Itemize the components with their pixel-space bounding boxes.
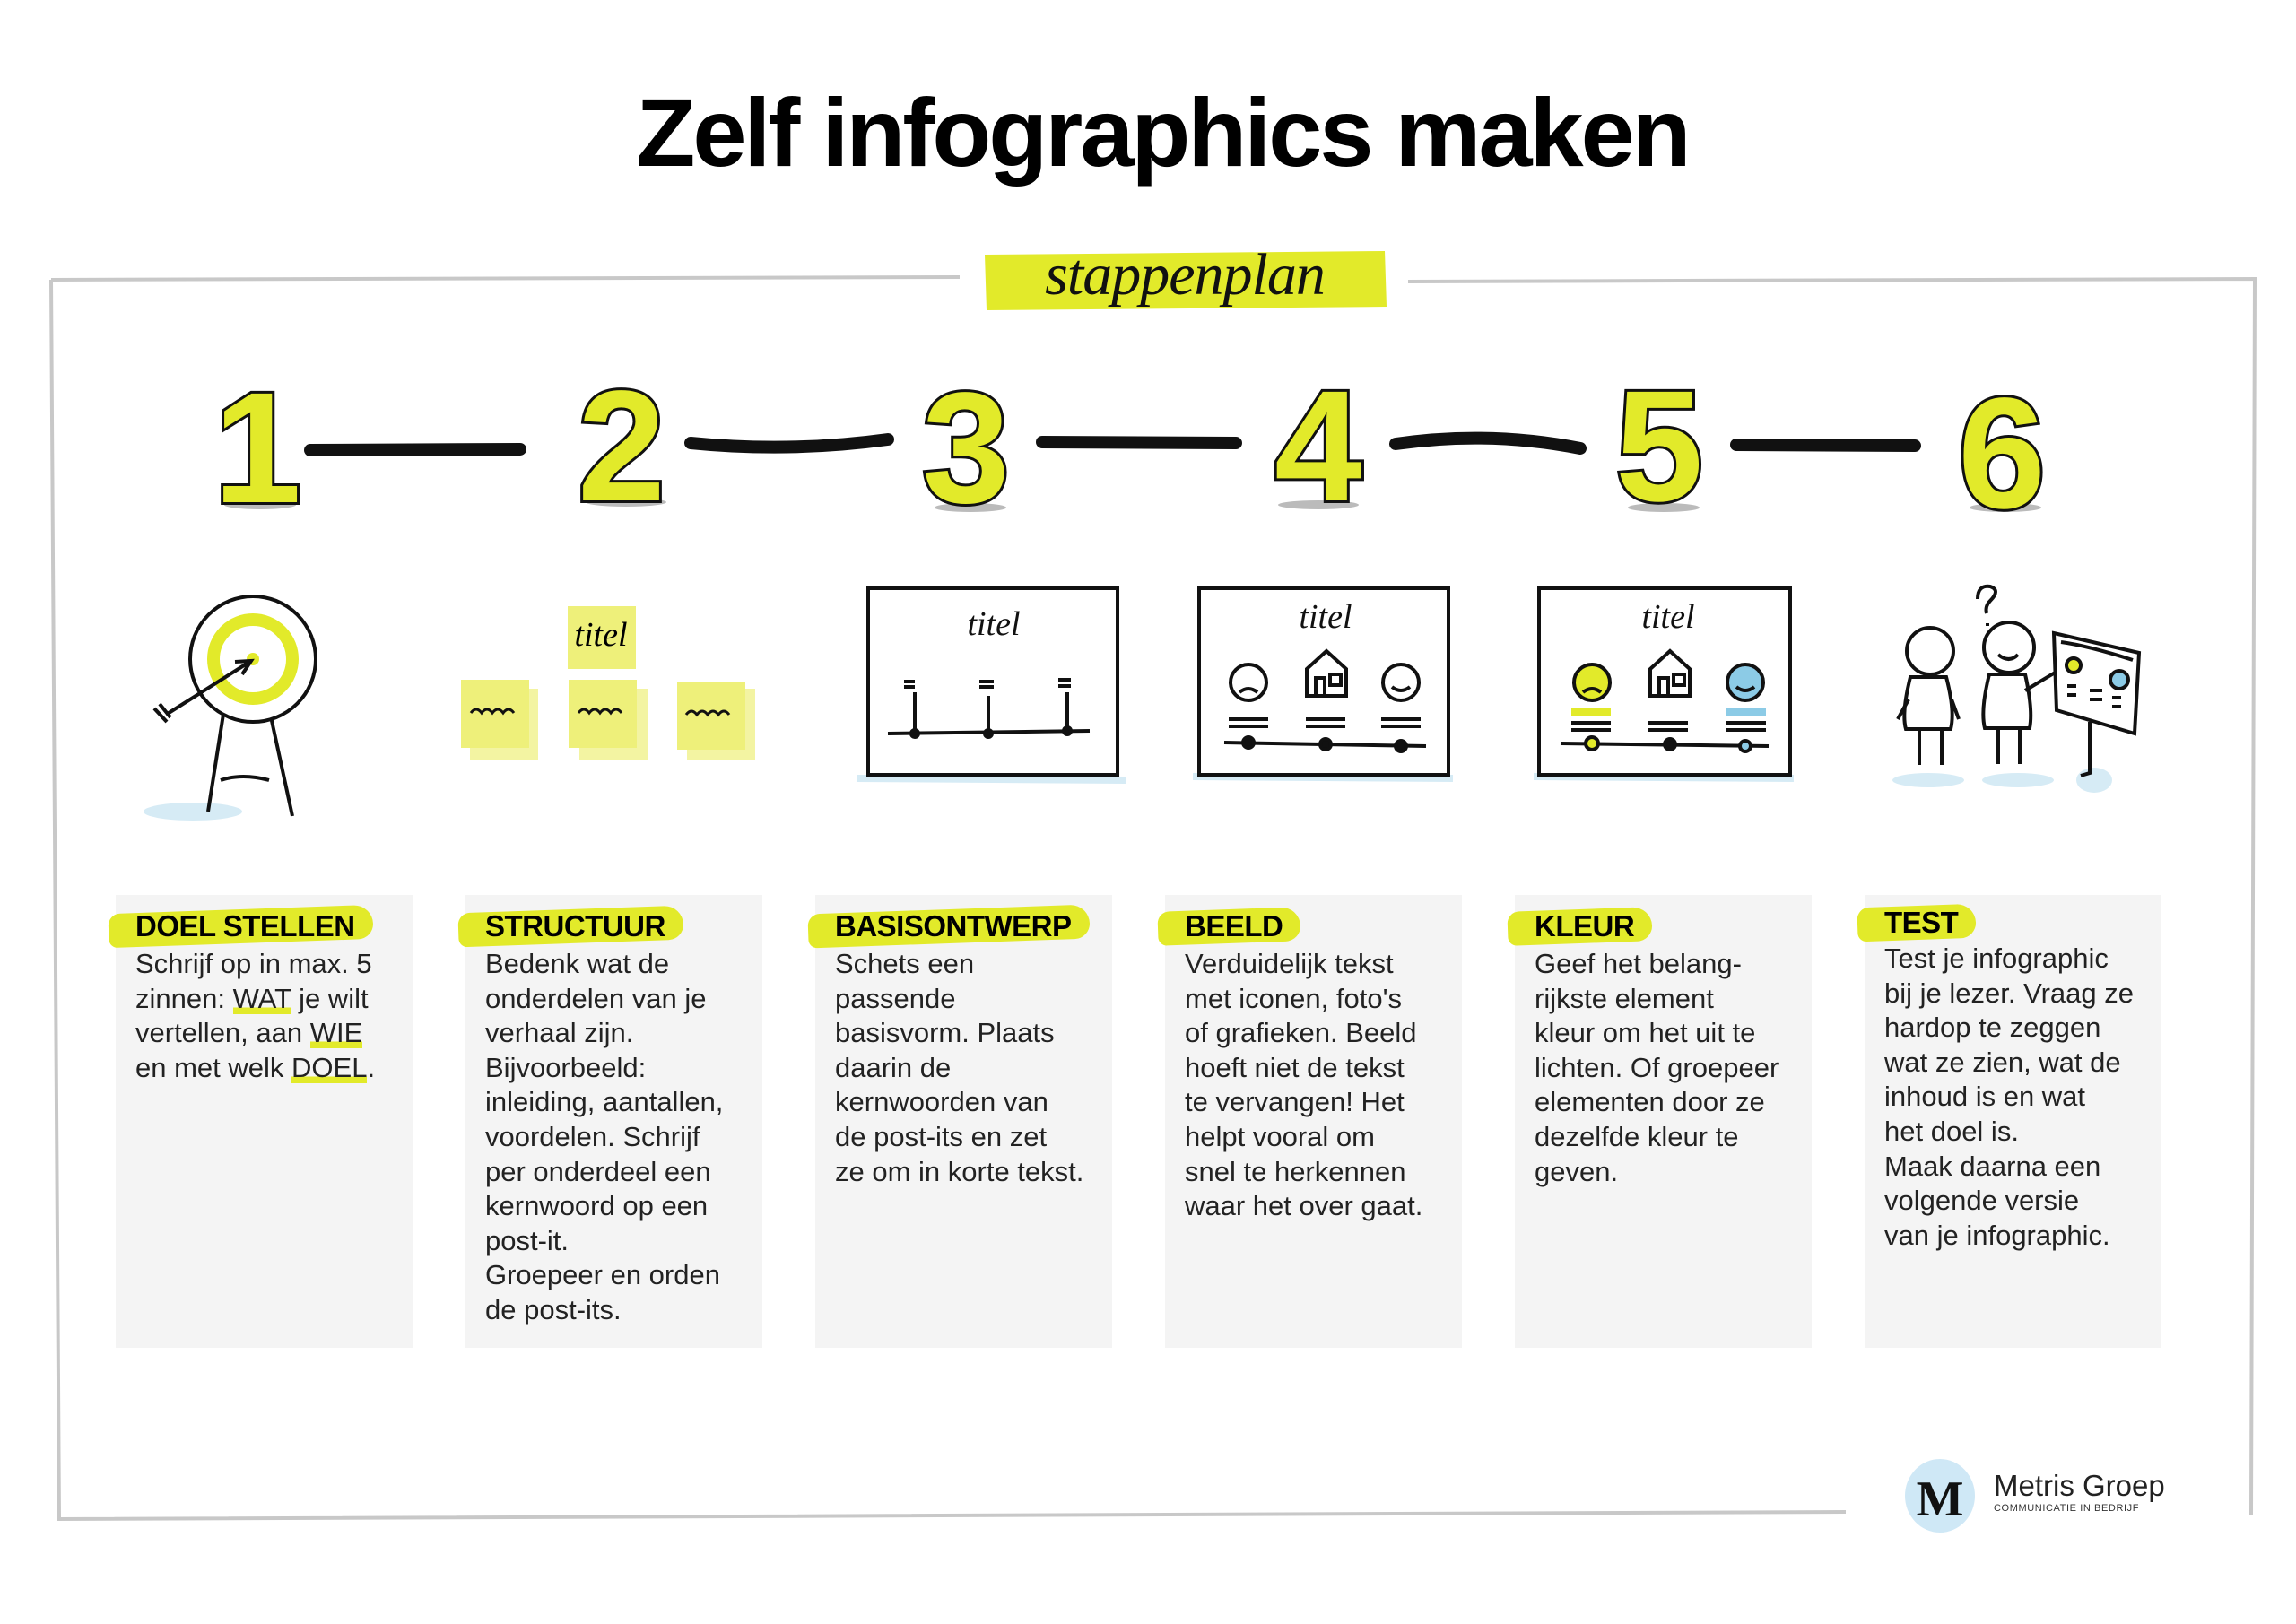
text: structuur: onderdelen van je [485, 983, 706, 1014]
icon: post-its: titel [574, 616, 628, 654]
panel: beeld [1165, 895, 1462, 1348]
step numbers: 4 [1274, 359, 1362, 534]
text: kleur [1535, 948, 1779, 1187]
panel: test [1865, 895, 2161, 1348]
text: basisontwerp: kernwoorden van [835, 1086, 1048, 1117]
icon: board basisontwerp: titel [967, 605, 1021, 643]
subtitle stappenplan [985, 242, 1387, 310]
panel: kleur [1515, 895, 1812, 1348]
text: kleur: elementen door ze [1535, 1086, 1765, 1117]
heading: kleur: KLEUR [1535, 909, 1634, 942]
text: kleur: rijkste element [1535, 983, 1714, 1014]
text: structuur: kernwoord op een [485, 1190, 708, 1221]
subtitle stappenplan: stappenplan [1045, 242, 1325, 308]
text: beeld: te vervangen! Het [1185, 1086, 1405, 1117]
icon: board kleur [1534, 588, 1794, 778]
text: basisontwerp: passende [835, 983, 955, 1014]
step numbers [213, 359, 2046, 542]
heading: kleur [1507, 908, 1652, 945]
text: test: Maak daarna een [1884, 1151, 2100, 1182]
text: test: volgende versie [1884, 1185, 2079, 1216]
text: test: wat ze zien, wat de [1884, 1046, 2121, 1078]
heading: structuur: STRUCTUUR [485, 909, 665, 942]
text: doel stellen [135, 948, 375, 1083]
panel: basisontwerp [815, 895, 1112, 1348]
text: beeld: waar het over gaat. [1185, 1190, 1422, 1221]
text: doel stellen: zinnen: WAT je wilt [135, 983, 369, 1014]
title: Zelf infographics maken [636, 78, 1689, 187]
text: basisontwerp [835, 948, 1083, 1187]
step numbers: 2 [578, 359, 665, 534]
text: structuur [485, 948, 723, 1325]
step numbers: 3 [922, 360, 1010, 536]
text: structuur: Bijvoorbeeld: [485, 1052, 646, 1083]
text: test: het doel is. [1884, 1116, 2019, 1147]
text: structuur: per onderdeel een [485, 1156, 711, 1187]
text: kleur: lichten. Of groepeer [1535, 1052, 1779, 1083]
text: beeld: met iconen, foto's [1185, 983, 1402, 1014]
text: structuur: Bedenk wat de [485, 948, 669, 979]
text: basisontwerp: daarin de [835, 1052, 951, 1083]
text: test [1884, 942, 2134, 1251]
text: test: inhoud is en wat [1884, 1081, 2085, 1112]
text: beeld: of grafieken. Beeld [1185, 1017, 1417, 1048]
text: beeld: hoeft niet de tekst [1185, 1052, 1405, 1083]
icon: target [144, 596, 316, 821]
text: kleur: dezelfde kleur te [1535, 1121, 1738, 1152]
icon: board basisontwerp [857, 588, 1126, 780]
text: basisontwerp: Schets een [835, 948, 974, 979]
step numbers: 5 [1615, 359, 1703, 534]
text: kleur: geven. [1535, 1156, 1618, 1187]
text: beeld [1185, 948, 1422, 1221]
text: structuur: verhaal zijn. [485, 1017, 633, 1048]
step numbers: 6 [1958, 366, 2046, 542]
text: test: hardop te zeggen [1884, 1012, 2100, 1043]
text: structuur: voordelen. Schrijf [485, 1121, 700, 1152]
icon: test persons [1892, 586, 2139, 793]
logo text: COMMUNICATIE IN BEDRIJF [1994, 1503, 2139, 1514]
heading: beeld: BEELD [1185, 909, 1283, 942]
text: structuur: de post-its. [485, 1294, 622, 1325]
text: structuur: post-it. [485, 1225, 569, 1256]
icon: post-its [461, 606, 755, 760]
text: test: Test je infographic [1884, 942, 2109, 974]
icon: board kleur: titel [1641, 598, 1695, 636]
heading: doel stellen: DOEL STELLEN [135, 909, 355, 942]
text: doel stellen: en met welk DOEL. [135, 1052, 375, 1083]
panel: structuur [465, 895, 762, 1348]
heading: doel stellen [108, 906, 373, 948]
logo mark: M [1917, 1472, 1963, 1527]
text: doel stellen: vertellen, aan WIE [135, 1017, 362, 1048]
heading: structuur [457, 906, 683, 947]
heading: basisontwerp [807, 905, 1090, 949]
text: test: van je infographic. [1884, 1220, 2110, 1251]
icon: board beeld [1193, 588, 1453, 778]
text: basisontwerp: de post-its en zet [835, 1121, 1047, 1152]
text: kleur: kleur om het uit te [1535, 1017, 1755, 1048]
connector lines [310, 439, 1915, 450]
heading: basisontwerp: BASISONTWERP [835, 909, 1072, 942]
text: basisontwerp: ze om in korte tekst. [835, 1156, 1083, 1187]
heading: test: TEST [1884, 906, 1958, 939]
text: structuur: Groepeer en orden [485, 1259, 720, 1290]
step numbers: 1 [213, 360, 301, 536]
text: basisontwerp: basisvorm. Plaats [835, 1017, 1055, 1048]
heading: test [1857, 904, 1977, 942]
icon: board beeld: titel [1299, 598, 1352, 636]
text: kleur: Geef het belang- [1535, 948, 1742, 979]
text: beeld: snel te herkennen [1185, 1156, 1405, 1187]
text: doel stellen: Schrijf op in max. 5 [135, 948, 372, 979]
heading: beeld [1157, 908, 1300, 945]
text: structuur: inleiding, aantallen, [485, 1086, 723, 1117]
panel: doel stellen [116, 895, 413, 1348]
text: beeld: Verduidelijk tekst [1185, 948, 1394, 979]
logo mark [1905, 1459, 1975, 1533]
logo text: Metris Groep [1994, 1469, 2165, 1502]
text: test: bij je lezer. Vraag ze [1884, 977, 2134, 1009]
text: beeld: helpt vooral om [1185, 1121, 1375, 1152]
